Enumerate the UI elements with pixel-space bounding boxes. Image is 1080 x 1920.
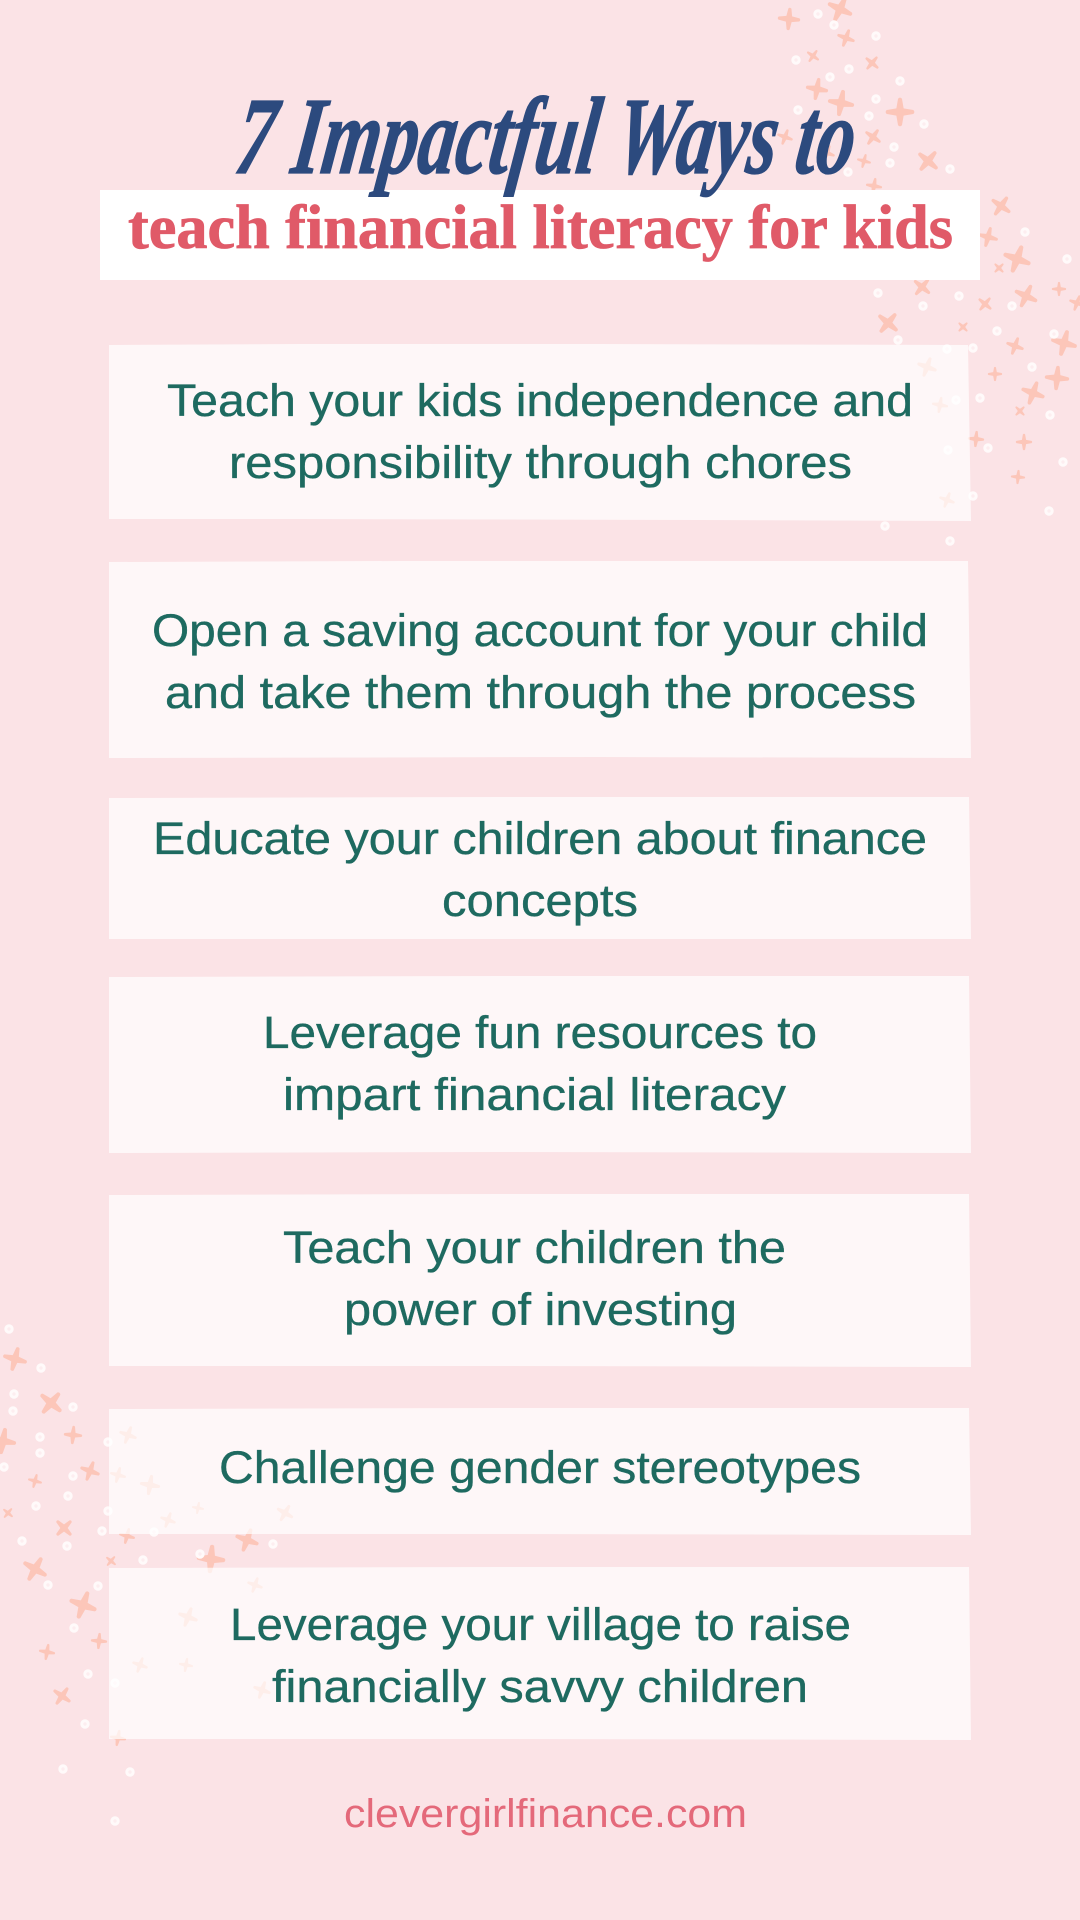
panel background: [109, 976, 971, 1153]
panel text: [167, 375, 913, 488]
decoration: top right rings: [793, 11, 1070, 544]
panel background: [109, 797, 971, 939]
panel: gender stereotypes: [109, 1408, 971, 1535]
panel background: [109, 1408, 971, 1535]
panel text: Teach your children the: [283, 1222, 786, 1273]
panel text: and take them through the process: [165, 667, 916, 718]
panel: saving account: [109, 561, 971, 758]
decoration: bottom left rings: [1, 1326, 276, 1824]
panel text: Educate your children about finance: [153, 813, 927, 864]
subtitle text: teach financial literacy for kids: [128, 194, 953, 262]
footer website: clevergirlfinance.com: [344, 1792, 747, 1836]
panel text: Leverage your village to raise: [230, 1599, 851, 1650]
panel text: impart financial literacy: [283, 1069, 787, 1120]
panel text: financially savvy children: [272, 1661, 808, 1712]
panel text: Teach your kids independence and: [167, 375, 913, 426]
panel text: [230, 1599, 851, 1712]
panel background: [109, 1194, 971, 1367]
panel: investing: [109, 1194, 971, 1367]
panel text: concepts: [442, 875, 638, 926]
panel background: [109, 561, 971, 758]
decoration: bottom left stars: [0, 1344, 298, 1747]
panel text: [263, 1007, 817, 1120]
panel text: Open a saving account for your child: [152, 605, 928, 656]
panel text: [283, 1222, 786, 1335]
panel background: [109, 344, 971, 521]
panel: village: [109, 1567, 971, 1740]
panel text: Challenge gender stereotypes: [219, 1442, 861, 1493]
panel background: [109, 1567, 971, 1740]
panel text: [152, 605, 928, 718]
subtitle banner: [100, 190, 980, 280]
panel: finance concepts: [109, 797, 971, 939]
panel: fun resources: [109, 976, 971, 1153]
panel text: [153, 813, 927, 926]
panel text: responsibility through chores: [229, 437, 852, 488]
decoration: top right stars: [774, 0, 1080, 511]
panel text: Leverage fun resources to: [263, 1007, 817, 1058]
panel text: power of investing: [344, 1284, 737, 1335]
banner background: [100, 190, 980, 280]
panel: chores: [109, 344, 971, 521]
